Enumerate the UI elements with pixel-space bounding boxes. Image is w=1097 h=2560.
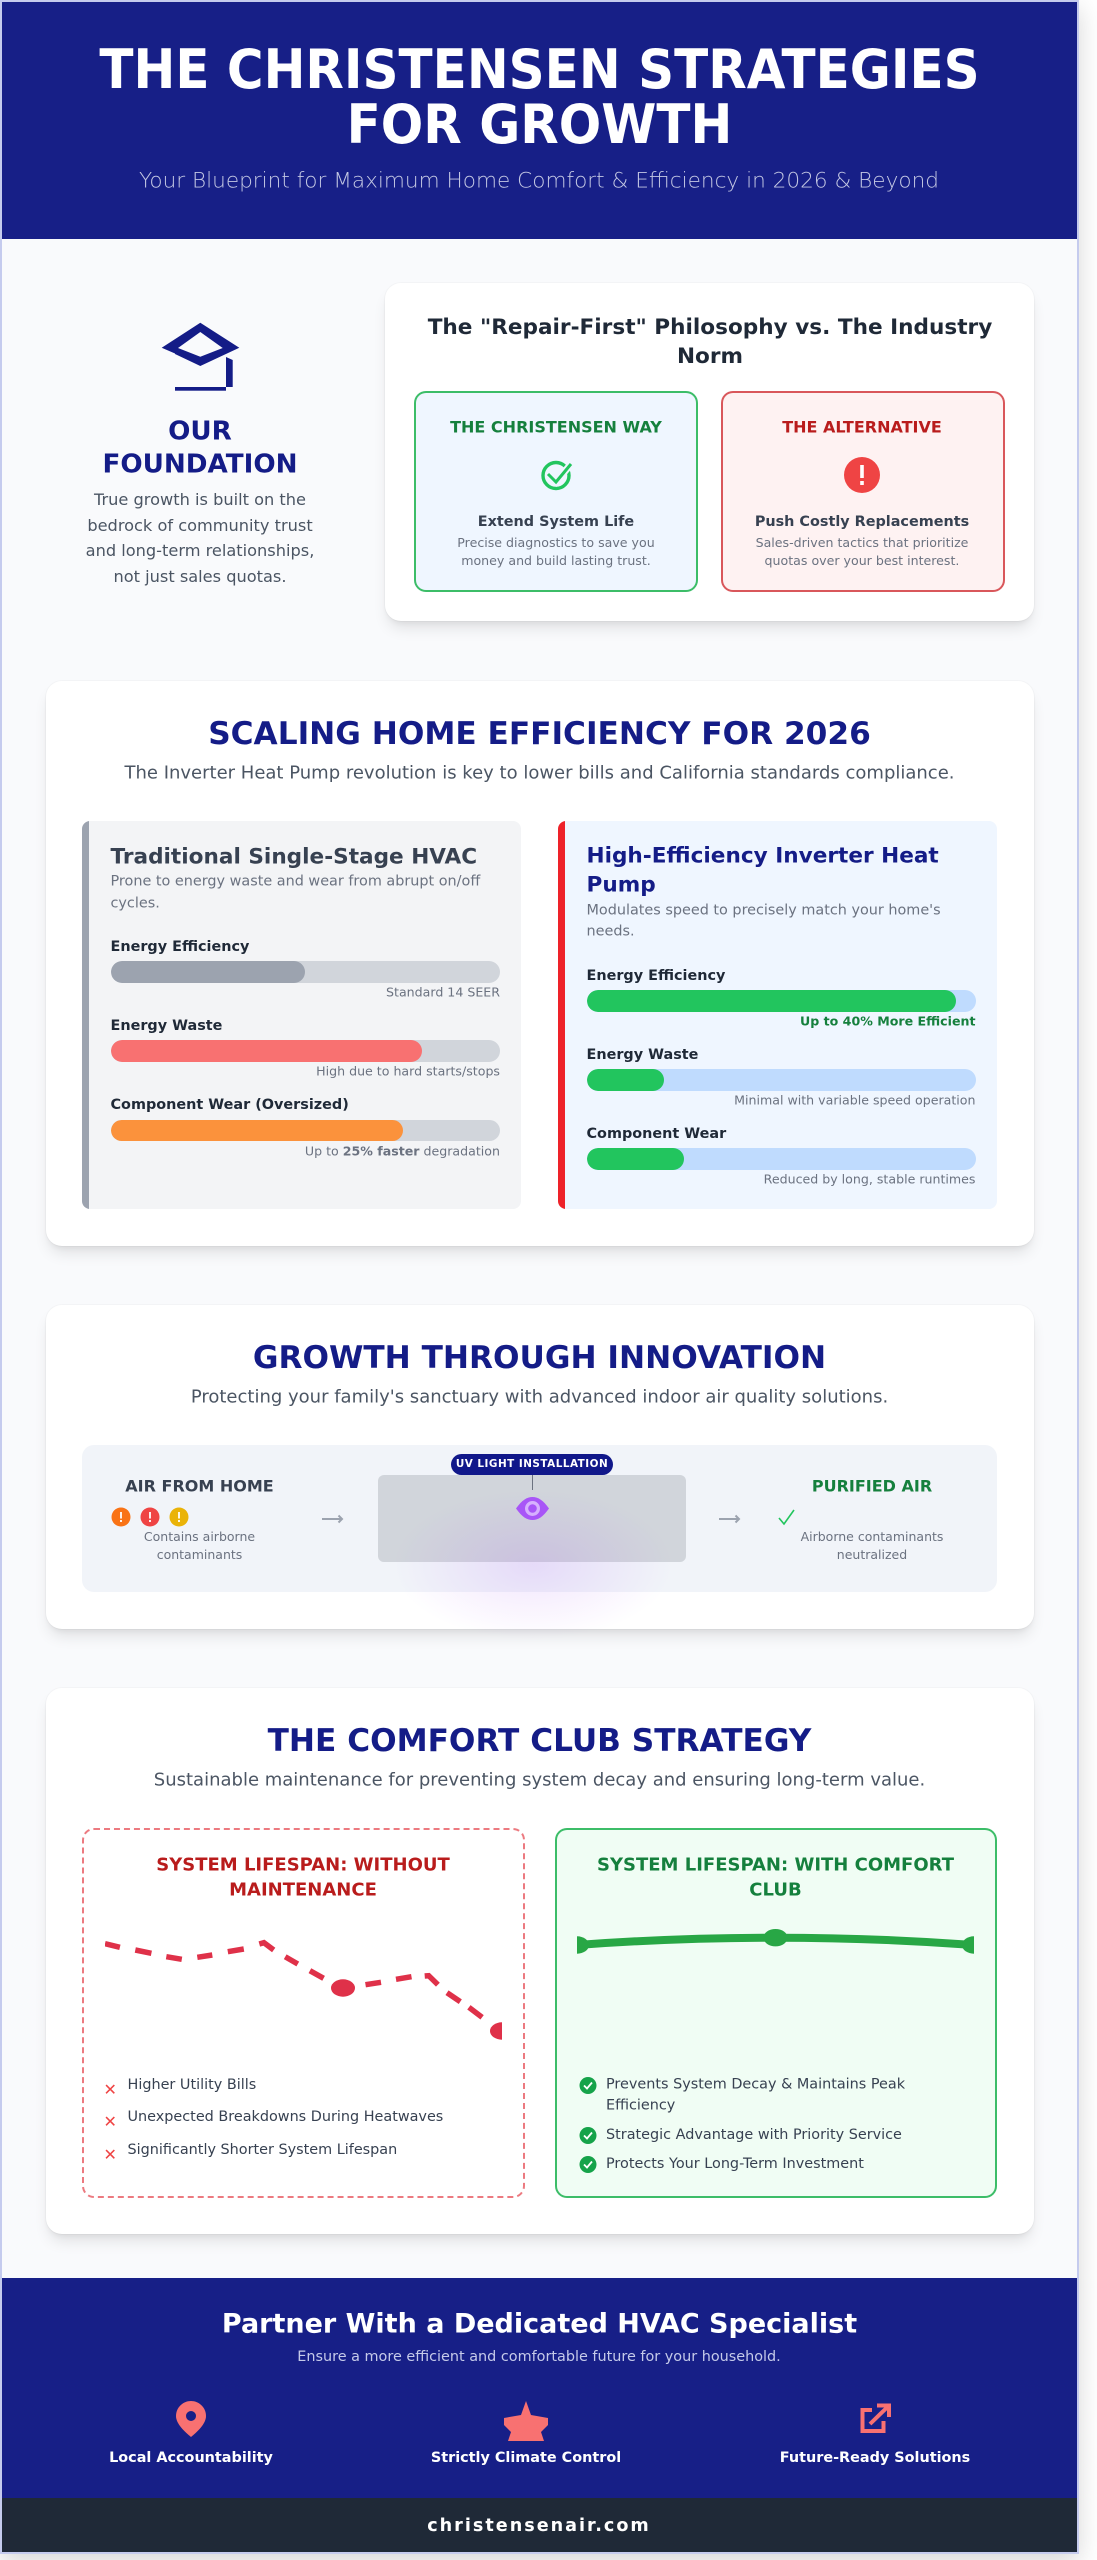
- risk item: [104, 2077, 256, 2099]
- section subtitle: Sustainable maintenance for preventing system decay and ensuring long-term value.: [154, 1770, 925, 1790]
- bar: component wear: [586, 1148, 976, 1170]
- label: Energy Waste: [586, 1047, 698, 1063]
- bar: energy waste: [586, 1069, 976, 1091]
- label: air from home: AIR FROM HOME: [125, 1476, 274, 1496]
- risk item: [104, 2142, 397, 2164]
- risk item: Higher Utility Bills: [128, 2077, 256, 2093]
- label: Component Wear (Oversized): [110, 1097, 349, 1113]
- section heading: GROWTH THROUGH INNOVATION: [253, 1340, 826, 1376]
- footer bar: [2, 2498, 1077, 2552]
- footer call to action: [2, 2278, 1077, 2498]
- point description: Sales-driven tactics that prioritize: [756, 534, 968, 550]
- risk item: Significantly Shorter System Lifespan: [128, 2142, 397, 2158]
- panel heading: SYSTEM LIFESPAN: WITH COMFORT: [597, 1854, 954, 1875]
- label: purified air: PURIFIED AIR: [812, 1476, 932, 1496]
- panel: traditional hvac: [82, 821, 521, 1209]
- foundation text: bedrock of community trust: [87, 515, 313, 534]
- card heading: THE CHRISTENSEN WAY: [450, 417, 662, 436]
- description: [800, 1529, 943, 1562]
- note: Up to 25% faster degradation: [305, 1143, 500, 1158]
- foundation text: and long-term relationships,: [86, 541, 314, 560]
- chart: declining lifespan: [105, 1940, 502, 2040]
- icon: star: [504, 2401, 548, 2441]
- label: Component Wear: [586, 1126, 726, 1142]
- label: Energy Waste: [110, 1018, 222, 1034]
- icon: check badge: [580, 2127, 596, 2144]
- benefit item: Prevents System Decay & Maintains Peak: [606, 2076, 905, 2092]
- foundation text: True growth is built on the: [94, 490, 306, 509]
- point description: quotas over your best interest.: [765, 552, 959, 568]
- bar: energy waste: [110, 1040, 500, 1062]
- panel heading: [428, 314, 992, 368]
- list: benefits: [580, 2076, 905, 2173]
- risk item: ✕: [104, 2080, 117, 2099]
- diagram: air flow: [82, 1445, 997, 1592]
- panel heading: Norm: [677, 344, 743, 368]
- feature label: Local Accountability: [109, 2450, 273, 2466]
- panel heading: MAINTENANCE: [229, 1880, 377, 1901]
- label: Energy Efficiency: [586, 968, 725, 984]
- description: Airborne contaminants: [801, 1529, 943, 1544]
- header banner: [2, 2, 1077, 239]
- risk item: [104, 2109, 443, 2131]
- heading: [102, 416, 298, 479]
- feature: strictly climate control: [431, 2401, 621, 2466]
- point title: Push Costly Replacements: [755, 514, 969, 530]
- benefit item: Strategic Advantage with Priority Service: [606, 2127, 902, 2143]
- bar: energy efficiency: [110, 961, 500, 983]
- label: Energy Efficiency: [110, 939, 249, 955]
- note: High due to hard starts/stops: [316, 1064, 500, 1078]
- card: the christensen way: [414, 391, 698, 592]
- description: contaminants: [157, 1547, 242, 1562]
- icons: contaminants: [112, 1508, 188, 1526]
- benefit item: [606, 2076, 905, 2114]
- feature: future-ready solutions: [780, 2404, 970, 2466]
- icon: graduation cap: [162, 322, 240, 391]
- point description: money and build lasting trust.: [461, 552, 651, 568]
- panel: comfort club strategy: [46, 1688, 1034, 2234]
- icon: check badge: [580, 2156, 596, 2173]
- panel heading: [597, 1854, 954, 1901]
- bar: component wear: [110, 1120, 500, 1141]
- panel description: [586, 902, 941, 940]
- section heading: SCALING HOME EFFICIENCY FOR 2026: [208, 716, 871, 752]
- label: uv light installation: UV LIGHT INSTALLATION: [456, 1458, 608, 1470]
- bar: energy efficiency: [586, 990, 976, 1012]
- feature label: Strictly Climate Control: [431, 2450, 621, 2466]
- card heading: THE ALTERNATIVE: [782, 417, 942, 436]
- note: Up to 40% More Efficient: [800, 1013, 976, 1028]
- panel: with comfort club: [554, 1828, 997, 2198]
- risk item: ✕: [104, 2112, 117, 2131]
- panel heading: Pump: [586, 872, 656, 897]
- connector line: [532, 1475, 533, 1490]
- panel heading: SYSTEM LIFESPAN: WITHOUT: [156, 1854, 450, 1875]
- panel: repair-first philosophy: [385, 283, 1034, 621]
- benefit item: Efficiency: [606, 2098, 675, 2114]
- list: risks: [104, 2077, 443, 2164]
- section subtitle: Protecting your family's sanctuary with advanced indoor air quality solutions.: [191, 1386, 888, 1407]
- panel: scaling home efficiency: [46, 681, 1034, 1246]
- title: THE CHRISTENSEN STRATEGIES: [99, 38, 980, 101]
- section heading: THE COMFORT CLUB STRATEGY: [268, 1723, 811, 1759]
- panel heading: [156, 1854, 450, 1901]
- risk item: Unexpected Breakdowns During Heatwaves: [128, 2109, 443, 2125]
- benefit item: Protects Your Long-Term Investment: [606, 2156, 864, 2172]
- title: [99, 38, 980, 156]
- note: Reduced by long, stable runtimes: [764, 1172, 976, 1186]
- heading: OUR: [168, 416, 232, 446]
- heading: FOUNDATION: [102, 449, 298, 479]
- foundation text: not just sales quotas.: [113, 567, 287, 586]
- footer subtitle: Ensure a more efficient and comfortable future for your household.: [297, 2349, 781, 2365]
- feature: local accountability: [109, 2401, 273, 2466]
- card: the alternative: [721, 391, 1005, 592]
- point description: [457, 534, 655, 568]
- panel heading: [586, 844, 939, 897]
- point description: Precise diagnostics to save you: [457, 534, 655, 550]
- panel description: Prone to energy waste and wear from abrupt on/off: [110, 874, 480, 890]
- icon: map pin: [176, 2401, 206, 2437]
- panel: without maintenance: [82, 1828, 525, 2198]
- panel: inverter heat pump: [558, 821, 997, 1209]
- title: FOR GROWTH: [347, 92, 732, 156]
- chart: steady lifespan: [577, 1929, 974, 1954]
- panel heading: High-Efficiency Inverter Heat: [586, 844, 939, 869]
- subtitle: Your Blueprint for Maximum Home Comfort & Efficiency in 2026 & Beyond: [139, 168, 939, 194]
- foundation text: [86, 490, 314, 586]
- label: uv light installation: [451, 1454, 613, 1475]
- box: air handler: [378, 1475, 686, 1562]
- arrow: [322, 1514, 344, 1524]
- accent stripe: [558, 821, 565, 1209]
- icon: check circle: [541, 460, 572, 490]
- arrow: [719, 1514, 740, 1524]
- panel description: Modulates speed to precisely match your home's: [586, 902, 941, 918]
- icon: check: [778, 1510, 795, 1526]
- panel heading: Traditional Single-Stage HVAC: [110, 844, 477, 870]
- website: christensenair.com: [427, 2516, 651, 2536]
- icon: external link: [860, 2404, 891, 2433]
- section subtitle: The Inverter Heat Pump revolution is key to lower bills and California standards compliance.: [124, 762, 955, 784]
- panel heading: The "Repair-First" Philosophy vs. The Industry: [428, 314, 992, 340]
- icon: uv eye: [516, 1497, 549, 1520]
- panel description: cycles.: [110, 895, 160, 911]
- risk item: ✕: [104, 2145, 117, 2164]
- note: Minimal with variable speed operation: [734, 1092, 976, 1108]
- accent stripe: [82, 821, 89, 1209]
- note: Standard 14 SEER: [386, 984, 500, 1000]
- uv glow: [393, 1490, 673, 1640]
- icon: alert: [844, 457, 880, 493]
- description: [144, 1529, 255, 1562]
- point title: Extend System Life: [478, 514, 634, 530]
- panel description: needs.: [586, 924, 635, 940]
- icon: check badge: [580, 2077, 596, 2094]
- panel: our foundation: [86, 322, 314, 586]
- point description: [756, 534, 968, 568]
- description: Contains airborne: [144, 1529, 255, 1544]
- panel heading: CLUB: [749, 1880, 802, 1901]
- description: neutralized: [837, 1547, 907, 1562]
- panel description: [110, 874, 481, 911]
- feature label: Future-Ready Solutions: [780, 2450, 970, 2466]
- panel: growth through innovation: [46, 1305, 1034, 1629]
- footer heading: Partner With a Dedicated HVAC Specialist: [222, 2308, 857, 2339]
